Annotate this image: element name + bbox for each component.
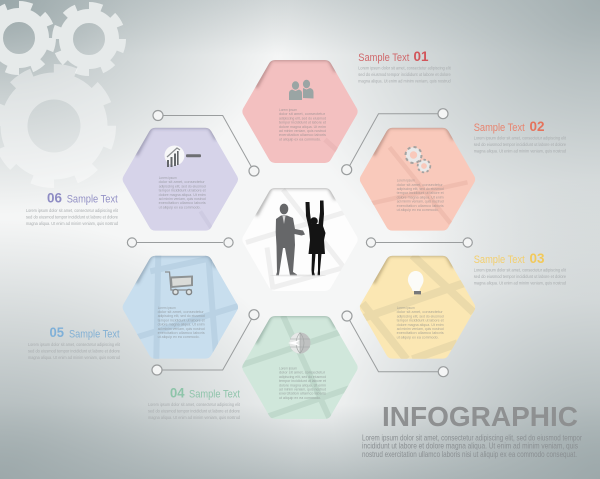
text: yellow hexagon: Lorem ipsum xyxy=(397,306,415,310)
text: pink hexagon: adipiscing elit, sed do eiusmod xyxy=(279,116,326,120)
text: pink hexagon: ad minim veniam, quis nostrud xyxy=(279,129,326,133)
label 03: magna aliqua. Ut enim ad minim veniam, quis nostrud xyxy=(474,281,566,287)
text: pink hexagon: Lorem ipsum xyxy=(279,108,297,112)
text: green hexagon: adipiscing elit, sed do eiusmod xyxy=(279,375,326,379)
label 03: 03 xyxy=(530,251,545,266)
text: pink hexagon: ut aliquip ex ea commodo. xyxy=(279,137,321,141)
text: pink hexagon: dolor sit amet, consectetur xyxy=(279,112,326,116)
text: peach hexagon xyxy=(397,179,444,212)
text: purple hexagon: dolore magna aliqua. Ut enim xyxy=(159,193,206,197)
text: green hexagon: Lorem ipsum xyxy=(279,366,297,370)
label 05: Lorem ipsum dolor sit amet, consectetur adipiscing elit xyxy=(28,342,121,348)
panel: blue hexagon xyxy=(120,255,240,359)
text: green hexagon: tempor incididunt ut labore et xyxy=(279,379,326,383)
label 01: magna aliqua. Ut enim ad minim veniam, quis nostrud xyxy=(358,79,451,85)
title: INFOGRAPHIC: INFOGRAPHIC xyxy=(382,401,578,432)
label 04: Sample Text xyxy=(189,388,240,400)
icon: people xyxy=(289,80,314,100)
text: purple hexagon: exercitation ullamco laboris xyxy=(159,201,206,205)
text: yellow hexagon: ut aliquip ex ea commodo. xyxy=(397,335,439,339)
label 05: sed do eiusmod tempor incididunt ut labore et dolore xyxy=(28,348,120,354)
text: green hexagon: ad minim veniam, quis nostrud xyxy=(279,388,326,392)
connector: middle left xyxy=(127,238,233,247)
icon: light bulb xyxy=(408,271,424,294)
label 04: 04 xyxy=(170,386,185,400)
label 05: magna aliqua. Ut enim ad minim veniam, quis nostrud xyxy=(28,355,120,361)
label 02: Lorem ipsum dolor sit amet, consectetur adipiscing elit xyxy=(474,136,567,142)
text: yellow hexagon xyxy=(397,306,444,339)
label 05 xyxy=(28,325,121,361)
panel: yellow hexagon xyxy=(360,255,475,359)
floor shadow xyxy=(270,274,326,276)
people: businessman and businesswoman xyxy=(270,200,326,276)
connector: purple to pink xyxy=(153,110,259,176)
panel: purple hexagon xyxy=(123,127,238,234)
text: pink hexagon: dolore magna aliqua. Ut enim xyxy=(279,125,326,129)
panel: peach hexagon xyxy=(360,127,475,231)
label 03 xyxy=(474,251,567,287)
icon: globe xyxy=(288,332,310,354)
text: purple hexagon xyxy=(159,176,206,209)
text: peach hexagon: tempor incididunt ut labore et xyxy=(397,191,444,195)
figure: businessman xyxy=(276,204,305,276)
text: blue hexagon: adipiscing elit, sed do eiusmod xyxy=(158,314,205,318)
gear: large xyxy=(0,69,111,183)
label 04: sed do eiusmod tempor incididunt ut labore et dolore xyxy=(148,408,240,414)
text: pink hexagon: exercitation ullamco laboris xyxy=(279,133,326,137)
connector: blue to green xyxy=(152,310,259,375)
icon: magnifier with chart xyxy=(164,146,201,167)
label 06: 06 xyxy=(47,190,62,205)
text: peach hexagon: ad minim veniam, quis nostrud xyxy=(397,200,444,204)
text: purple hexagon: dolor sit amet, consectetur xyxy=(159,180,206,184)
text: blue hexagon: ad minim veniam, quis nostrud xyxy=(158,327,205,331)
label 05: Sample Text xyxy=(69,328,120,340)
label 03: Sample Text xyxy=(474,254,525,266)
text: green hexagon: exercitation ullamco laboris xyxy=(279,392,326,396)
label 06: Sample Text xyxy=(67,194,118,206)
label 06 xyxy=(26,190,119,227)
label 06: magna aliqua. Ut enim ad minim veniam, quis nostrud xyxy=(26,221,118,227)
label 04: magna aliqua. Ut enim ad minim veniam, quis nostrud xyxy=(148,415,240,421)
label 01 xyxy=(358,49,451,85)
text: peach hexagon: dolore magna aliqua. Ut enim xyxy=(397,195,444,199)
connector: pink to peach xyxy=(342,109,448,175)
label 01: sed do eiusmod tempor incididunt ut labore et dolore xyxy=(358,72,451,78)
decorative gears xyxy=(0,5,122,183)
text: yellow hexagon: dolor sit amet, consectetur xyxy=(397,310,444,314)
panel: green hexagon xyxy=(240,315,360,420)
text: peach hexagon: Lorem ipsum xyxy=(397,179,415,183)
label 04: Lorem ipsum dolor sit amet, consectetur adipiscing elit xyxy=(148,402,241,408)
text: blue hexagon: Lorem ipsum xyxy=(158,306,176,310)
text block: footer description xyxy=(362,434,582,459)
text: purple hexagon: Lorem ipsum xyxy=(159,176,177,180)
connector: middle right xyxy=(366,238,472,247)
text: blue hexagon xyxy=(158,306,205,339)
text: blue hexagon: dolor sit amet, consectetur xyxy=(158,310,205,314)
text: blue hexagon: dolore magna aliqua. Ut enim xyxy=(158,323,205,327)
gear: top middle xyxy=(56,6,122,72)
label 06: sed do eiusmod tempor incididunt ut labore et dolore xyxy=(26,214,118,220)
label 01: Lorem ipsum dolor sit amet, consectetur adipiscing elit xyxy=(358,66,451,72)
label 02: Sample Text xyxy=(474,122,525,134)
text: peach hexagon: ut aliquip ex ea commodo. xyxy=(397,208,439,212)
label 02 xyxy=(474,119,567,155)
label 06: Lorem ipsum dolor sit amet, consectetur adipiscing elit xyxy=(26,208,119,214)
label 05: 05 xyxy=(50,325,64,340)
text: pink hexagon xyxy=(279,108,326,141)
label 02: 02 xyxy=(530,119,544,134)
text: yellow hexagon: adipiscing elit, sed do eiusmod xyxy=(397,314,444,318)
text: purple hexagon: ut aliquip ex ea commodo. xyxy=(159,205,201,209)
text: blue hexagon: tempor incididunt ut labore et xyxy=(158,318,205,322)
panel: centre white hexagon xyxy=(255,188,336,217)
label 01: 01 xyxy=(414,49,429,64)
text: green hexagon: dolore magna aliqua. Ut enim xyxy=(279,383,326,387)
label 04 xyxy=(148,386,241,421)
text: yellow hexagon: tempor incididunt ut labore et xyxy=(397,319,444,323)
text: blue hexagon: exercitation ullamco laboris xyxy=(158,331,205,335)
gear: top left xyxy=(0,5,52,71)
figure: businesswoman xyxy=(306,200,326,276)
text: purple hexagon: adipiscing elit, sed do eiusmod xyxy=(159,184,206,188)
text: pink hexagon: tempor incididunt ut labore et xyxy=(279,121,326,125)
text: peach hexagon: dolor sit amet, consectetur xyxy=(397,183,444,187)
connector: yellow to green xyxy=(342,311,448,377)
text: yellow hexagon: exercitation ullamco laboris xyxy=(397,331,444,335)
text: yellow hexagon: dolore magna aliqua. Ut enim xyxy=(397,323,444,327)
text: green hexagon: dolor sit amet, consectetur xyxy=(279,371,326,375)
label 02: magna aliqua. Ut enim ad minim veniam, quis nostrud xyxy=(474,149,566,155)
panel: pink hexagon xyxy=(242,60,358,163)
text: purple hexagon: ad minim veniam, quis nostrud xyxy=(159,197,206,201)
text: green hexagon xyxy=(279,366,326,400)
label 02: sed do eiusmod tempor incididunt ut labore et dolore xyxy=(474,142,566,148)
icon: gears xyxy=(406,147,430,172)
text: purple hexagon: tempor incididunt ut labore et xyxy=(159,189,206,193)
label 01: Sample Text xyxy=(358,52,409,64)
icon: shopping cart xyxy=(165,272,193,295)
text: peach hexagon: adipiscing elit, sed do eiusmod xyxy=(397,187,444,191)
text: green hexagon: ut aliquip ex ea commodo. xyxy=(279,396,321,400)
text: blue hexagon: ut aliquip ex ea commodo. xyxy=(158,335,200,339)
label 03: Lorem ipsum dolor sit amet, consectetur adipiscing elit xyxy=(474,268,567,274)
text: peach hexagon: exercitation ullamco laboris xyxy=(397,204,444,208)
label 03: sed do eiusmod tempor incididunt ut labore et dolore xyxy=(474,274,566,280)
text: yellow hexagon: ad minim veniam, quis nostrud xyxy=(397,327,444,331)
